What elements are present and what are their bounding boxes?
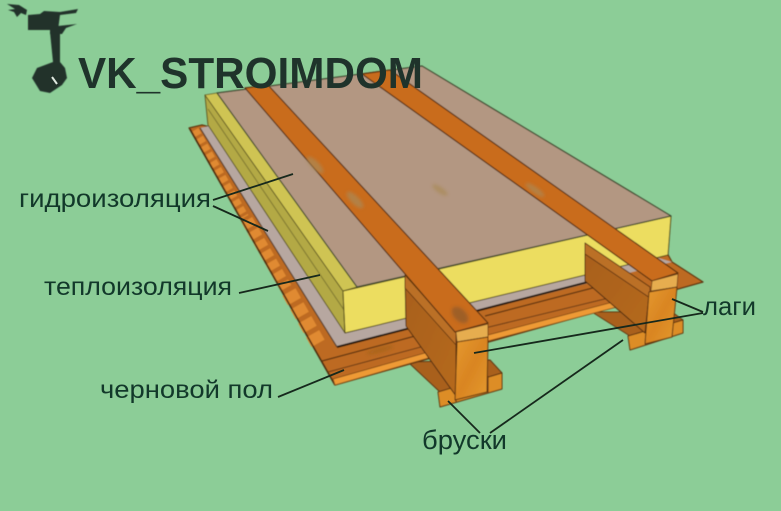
illustration: floor construction <box>189 66 703 407</box>
leader line: теплоизоляция <box>239 275 320 293</box>
label: бруски: бруски <box>422 425 507 455</box>
label: гидроизоляция: гидроизоляция <box>19 185 211 213</box>
logo: drill icon <box>7 4 78 93</box>
leader line: черновой пол <box>278 370 344 397</box>
label: лаги: лаги <box>703 291 756 321</box>
lower bar: right support <box>592 312 683 350</box>
label: теплоизоляция: теплоизоляция <box>44 273 232 301</box>
leader lines: бруски <box>448 340 623 433</box>
leader lines: лаги <box>474 299 703 353</box>
vapour barrier sheet <box>200 125 672 347</box>
insulation top covered with membrane <box>217 66 671 287</box>
insulation side <box>205 93 357 333</box>
right joist <box>362 70 678 344</box>
insulation front face <box>343 216 671 333</box>
leader lines: гидроизоляция <box>213 174 293 231</box>
wood grain marks <box>304 154 546 357</box>
left joist <box>245 85 488 400</box>
rough floor boards <box>189 125 703 385</box>
lower bar: left support <box>408 360 502 407</box>
label: черновой пол: черновой пол <box>100 376 273 404</box>
board ends along the left edge <box>195 130 319 345</box>
logo text: VK_STROIMDOM <box>78 49 423 98</box>
logo: drill highlight <box>52 77 57 84</box>
